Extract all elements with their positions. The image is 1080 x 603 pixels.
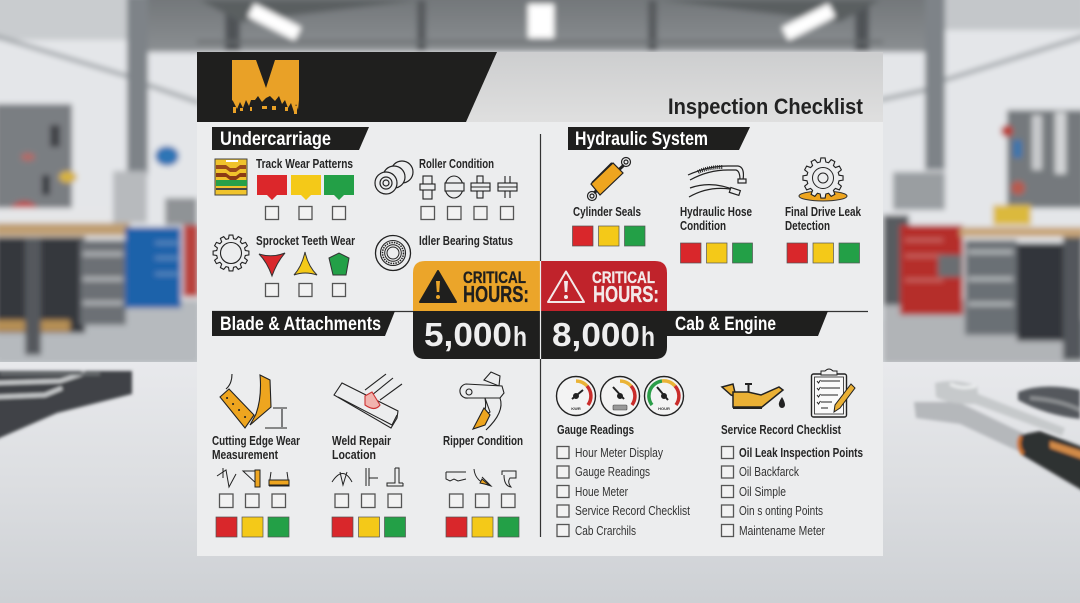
title: Inspection Checklist: Inspection Checklist bbox=[668, 94, 864, 119]
label: Sprocket Teeth Wear: Sprocket Teeth Wear bbox=[256, 233, 355, 248]
cutting edge options bbox=[216, 468, 289, 537]
icon: three gauges: KWR bbox=[571, 406, 581, 411]
weld repair options bbox=[332, 468, 406, 537]
header black band bbox=[197, 52, 497, 122]
icon: clipboard and pencil bbox=[812, 369, 855, 417]
checklist: gauge readings bbox=[557, 445, 690, 538]
label: Track Wear Patterns: Track Wear Patterns bbox=[256, 156, 353, 171]
checklist: service record bbox=[722, 445, 863, 538]
label: Gauge Readings: Gauge Readings bbox=[557, 422, 634, 437]
icon: three gauges: HOUR bbox=[658, 406, 670, 411]
panel: checklist card bbox=[197, 52, 883, 556]
text: critical hours amber: CRITICAL bbox=[463, 269, 526, 287]
section: Blade & Attachments bbox=[212, 311, 523, 537]
number: 5,000h: 5,000 bbox=[424, 316, 512, 353]
checklist: gauge readings: Hour Meter Display bbox=[575, 445, 663, 460]
icon: final drive leak bbox=[799, 158, 847, 201]
section: Undercarriage bbox=[212, 127, 517, 296]
ripper options bbox=[446, 469, 519, 537]
heading: Cab & Engine bbox=[667, 311, 828, 336]
text: critical hours red: HOURS: bbox=[593, 281, 659, 307]
critical hours badge bbox=[413, 261, 667, 359]
checklist: service record: Oil Leak Inspection Points bbox=[739, 445, 863, 460]
label: Cylinder Seals: Cylinder Seals bbox=[573, 204, 641, 219]
dividers bbox=[212, 134, 868, 537]
checklist: gauge readings: Cab Crarchils bbox=[575, 523, 636, 538]
right tool board and bench bbox=[1007, 110, 1080, 208]
status squares: final drive bbox=[787, 243, 860, 263]
centre seam bbox=[540, 261, 542, 359]
label: Cutting Edge Wear Measurement: Measurement bbox=[212, 447, 279, 462]
number: 8,000h: 8,000 bbox=[552, 316, 640, 353]
track wear markers bbox=[257, 175, 354, 220]
checklist: service record: Oin s onting Points bbox=[739, 503, 823, 518]
checklist: gauge readings: Houe Meter bbox=[575, 484, 629, 499]
label: Hydraulic Hose Condition: Hydraulic Hose bbox=[680, 204, 752, 219]
label: Weld Repair Location: Location bbox=[332, 447, 376, 462]
icon: hydraulic cylinder bbox=[588, 158, 630, 200]
left tool board and bench bbox=[0, 104, 72, 208]
label: Final Drive Leak Detection: Detection bbox=[785, 218, 830, 233]
number: 8,000h: h bbox=[641, 321, 655, 352]
heading: Hydraulic System: Hydraulic System bbox=[575, 129, 708, 150]
floor bbox=[0, 300, 200, 364]
text: critical hours amber: HOURS: bbox=[463, 281, 529, 307]
section: Hydraulic System bbox=[568, 127, 862, 263]
icon: oil can bbox=[722, 384, 785, 408]
icon: cutting edge bbox=[220, 374, 287, 428]
icon: track wear layers bbox=[215, 159, 247, 195]
heading: Undercarriage: Undercarriage bbox=[220, 129, 331, 150]
logo: distressed M bbox=[232, 60, 299, 114]
amber critical panel bbox=[413, 261, 540, 311]
label: Roller Condition: Roller Condition bbox=[419, 156, 494, 171]
icon: idler bearing bbox=[376, 236, 410, 270]
label: Cutting Edge Wear Measurement: Cutting Edge Wear bbox=[212, 433, 300, 448]
right wrenches bbox=[1018, 386, 1080, 419]
checklist: service record: Oil Simple bbox=[739, 484, 786, 499]
icon: hydraulic hoses bbox=[688, 166, 746, 197]
icon: three gauges bbox=[556, 376, 684, 416]
icon: rollers bbox=[375, 161, 413, 194]
icon: black warning triangle bbox=[420, 271, 456, 302]
icon: sprocket bbox=[213, 235, 249, 271]
red critical panel bbox=[541, 261, 667, 311]
icon: white warning triangle bbox=[548, 272, 584, 302]
number: 5,000h: h bbox=[513, 321, 527, 352]
heading: Blade & Attachments: Blade & Attachments bbox=[220, 314, 381, 335]
black hours panel bbox=[413, 311, 667, 359]
text: critical hours red: CRITICAL bbox=[592, 269, 655, 287]
sprocket wear markers bbox=[259, 252, 349, 296]
section: Cab & Engine bbox=[556, 311, 863, 538]
label: Final Drive Leak Detection: Final Drive Leak bbox=[785, 204, 862, 219]
label: Service Record Checklist: Service Record Checklist bbox=[721, 422, 842, 437]
label: Weld Repair Location: Weld Repair bbox=[332, 433, 391, 448]
left wrench tray bbox=[0, 371, 132, 440]
status squares: hose bbox=[680, 243, 752, 263]
roller condition options bbox=[420, 176, 517, 220]
status squares: cylinder seals bbox=[572, 226, 645, 246]
checklist: service record: Oil Backfarck bbox=[739, 464, 799, 479]
checklist: gauge readings: Gauge Readings bbox=[575, 464, 650, 479]
icon: weld repair bbox=[334, 374, 402, 428]
icon: ripper bbox=[460, 372, 504, 430]
label: Ripper Condition: Ripper Condition bbox=[443, 433, 523, 448]
label: Idler Bearing Status: Idler Bearing Status bbox=[419, 233, 513, 248]
label: Hydraulic Hose Condition: Condition bbox=[680, 218, 726, 233]
heading: Cab & Engine: Cab & Engine bbox=[675, 314, 776, 335]
checklist: service record: Maintename Meter bbox=[739, 523, 826, 538]
checklist: gauge readings: Service Record Checklist bbox=[575, 503, 690, 518]
